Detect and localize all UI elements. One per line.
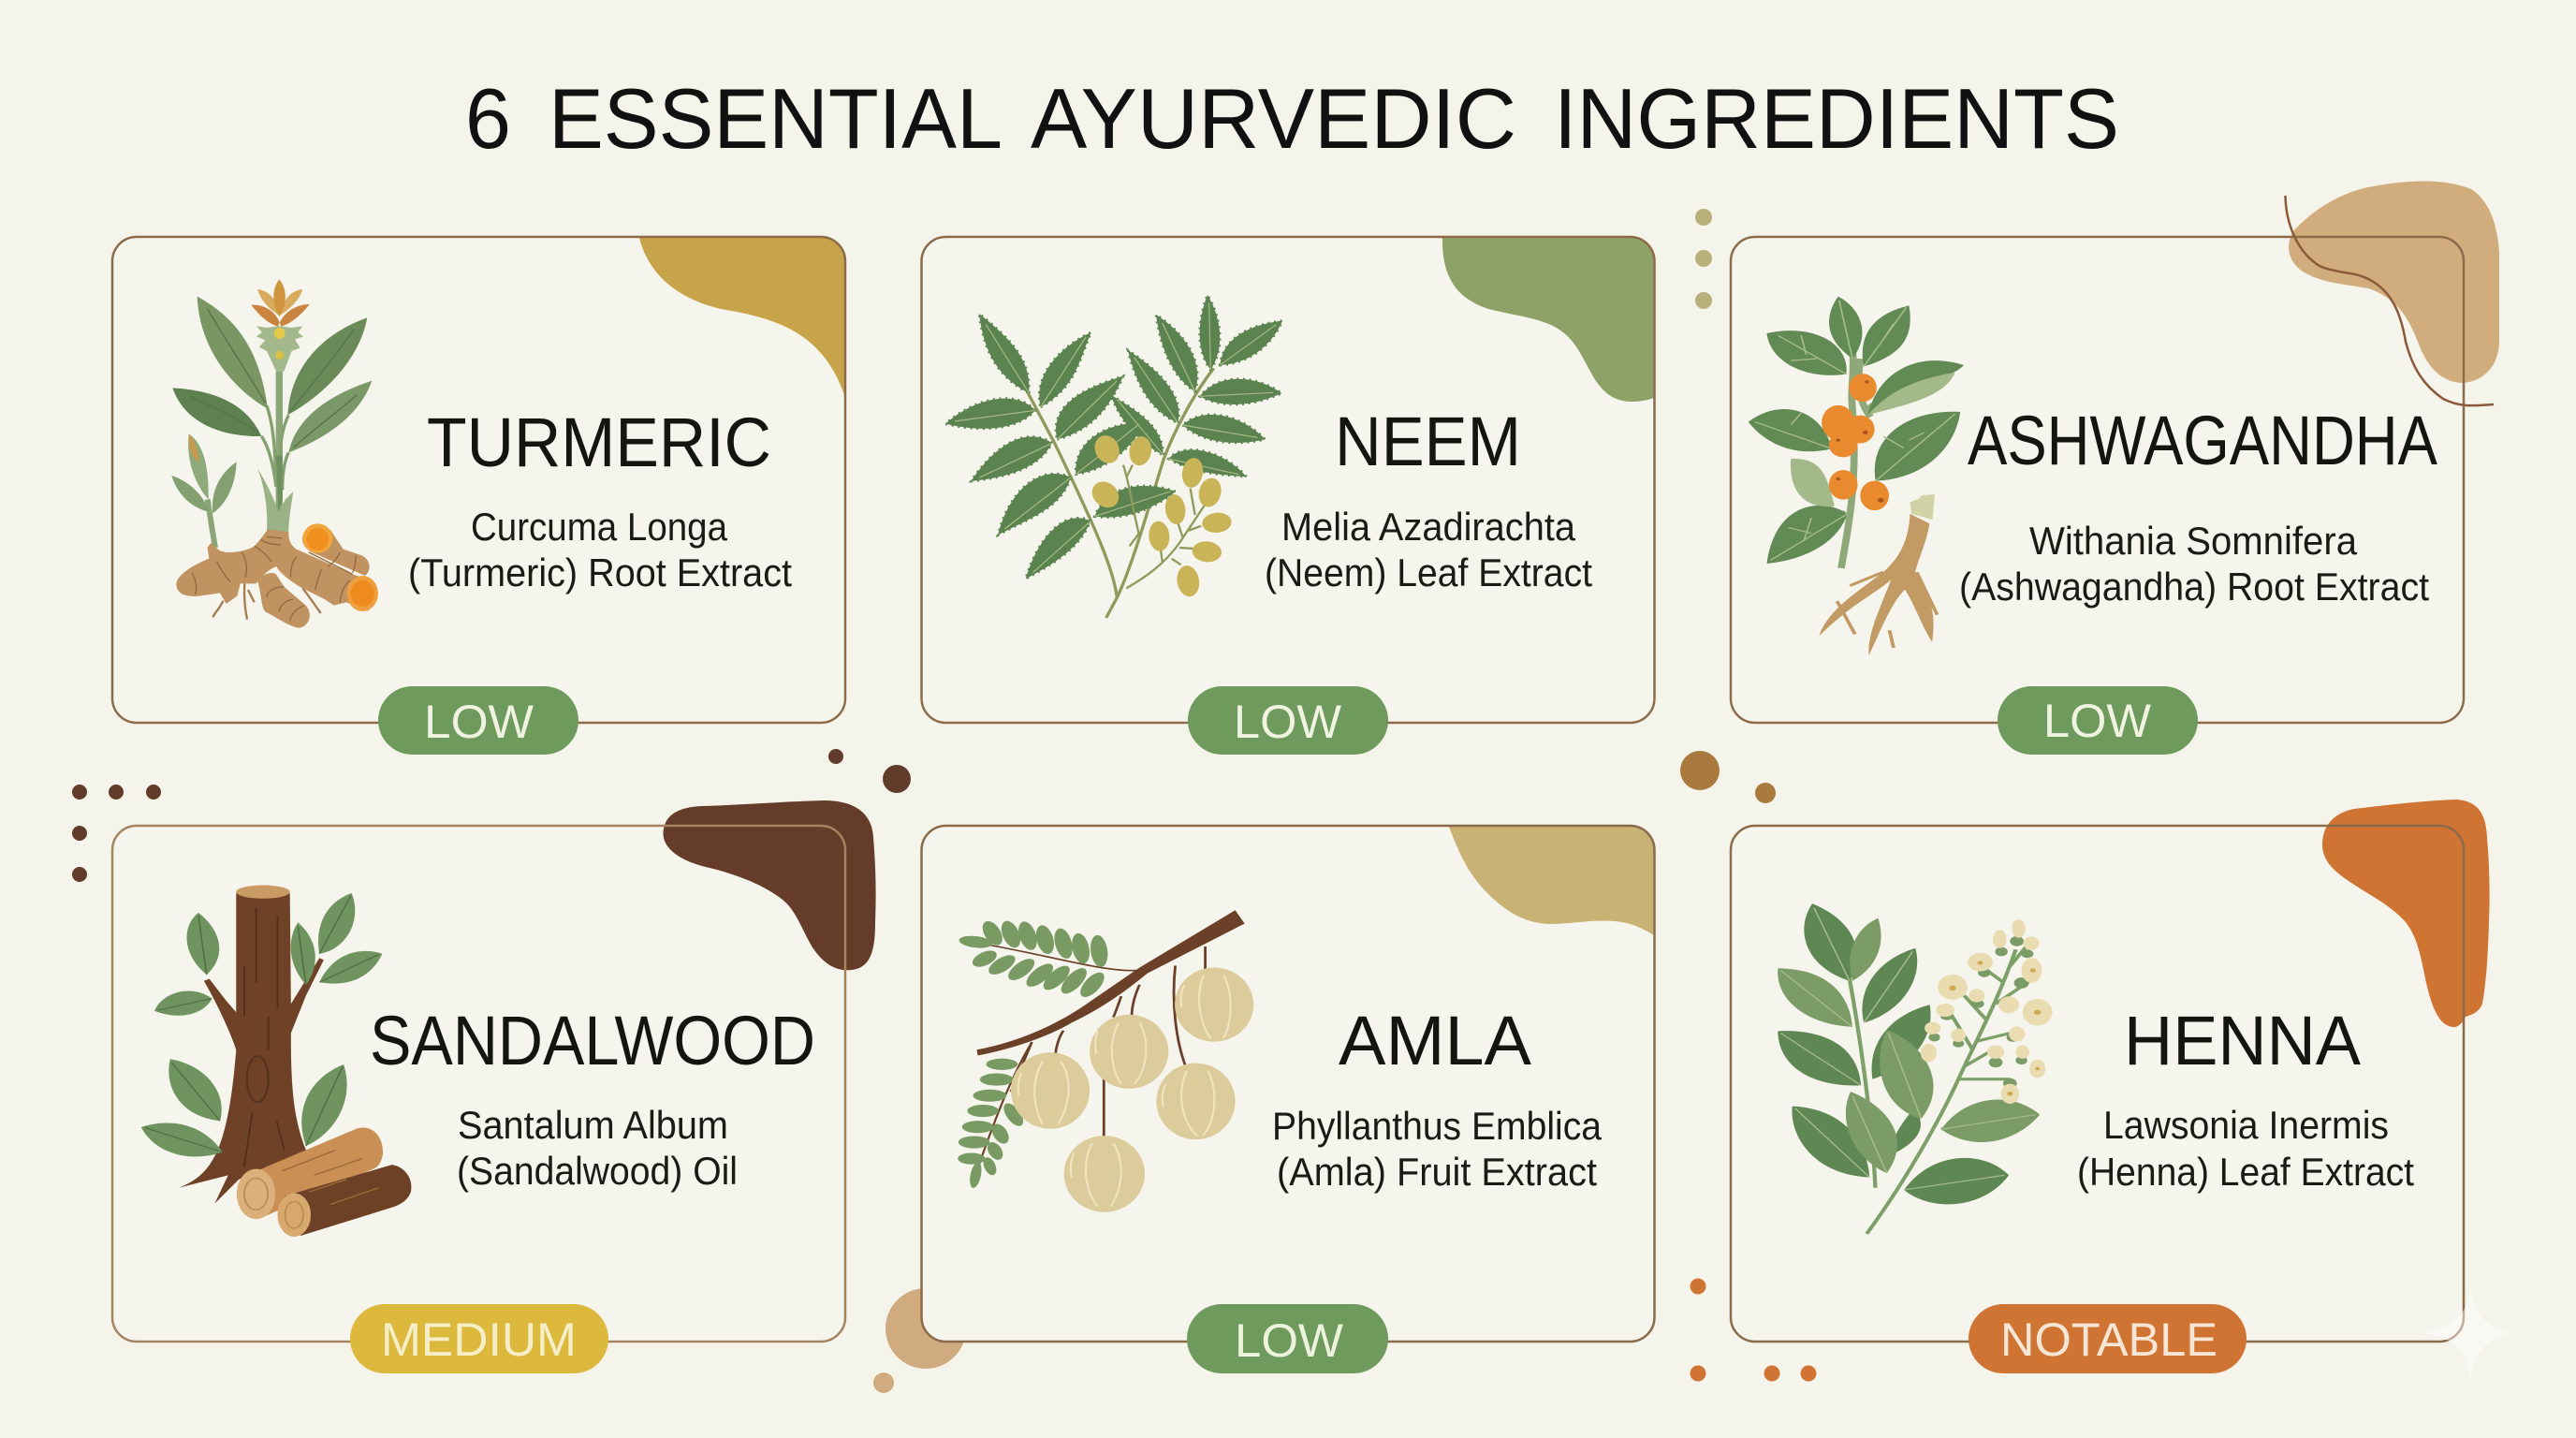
icon: neem branch <box>945 295 1282 618</box>
icon: ashwagandha plant and root <box>1749 297 1964 655</box>
decorative dots: orange <box>1690 1279 1816 1382</box>
text: neem botanical name: Melia Azadirachta <box>1281 505 1576 549</box>
badge: low: LOW <box>424 696 534 748</box>
text: neem botanical name: (Neem) Leaf Extract <box>1265 550 1592 594</box>
decorative shape: tan circle and dot <box>873 1288 966 1393</box>
badge: low <box>378 686 578 755</box>
text: ashwagandha botanical name: Withania Somnifera <box>2029 519 2358 563</box>
panel: neem <box>921 237 1655 755</box>
text: sandalwood botanical name <box>457 1103 738 1193</box>
text: turmeric botanical name <box>408 505 792 594</box>
panel: sandalwood <box>112 800 876 1373</box>
panel: amla <box>921 826 1655 1373</box>
panel: ashwagandha <box>1731 182 2499 755</box>
text: sandalwood botanical name: Santalum Album <box>458 1103 728 1147</box>
badge: notable: NOTABLE <box>2000 1313 2217 1366</box>
text: neem botanical name <box>1265 505 1592 594</box>
decorative dots: brown centre <box>828 749 911 793</box>
decorative dots: sage column <box>1695 209 1712 309</box>
text: amla botanical name: (Amla) Fruit Extract <box>1277 1150 1597 1194</box>
icon: amla branch with fruit <box>958 910 1253 1212</box>
decorative dots: brown corner <box>72 785 161 882</box>
heading: henna: HENNA <box>2124 1002 2362 1079</box>
heading: neem: NEEM <box>1335 403 1521 480</box>
text: amla botanical name <box>1272 1104 1603 1194</box>
badge: low <box>1187 1304 1388 1373</box>
panel: turmeric <box>112 237 845 755</box>
decorative curve <box>2286 196 2494 405</box>
heading: amla: AMLA <box>1339 1002 1532 1079</box>
text: ashwagandha botanical name <box>1959 519 2429 609</box>
heading: ashwagandha: ASHWAGANDHA <box>1968 402 2438 479</box>
icon: turmeric plant <box>171 279 378 628</box>
text: turmeric botanical name: Curcuma Longa <box>471 505 728 549</box>
badge: medium <box>350 1304 608 1373</box>
panel: henna <box>1731 800 2490 1373</box>
icon: henna sprig with flowers <box>1778 903 2053 1234</box>
text: henna botanical name <box>2077 1103 2414 1194</box>
badge: medium: MEDIUM <box>381 1313 577 1366</box>
text: sandalwood botanical name: (Sandalwood) Oil <box>457 1149 738 1193</box>
title <box>465 72 2119 167</box>
badge: low <box>1998 686 2198 755</box>
text: henna botanical name: (Henna) Leaf Extract <box>2077 1150 2414 1194</box>
title: INGREDIENTS <box>1554 72 2119 167</box>
badge: low: LOW <box>1235 1314 1344 1367</box>
text: turmeric botanical name: (Turmeric) Root Extract <box>408 550 792 594</box>
decorative dots: ochre <box>1680 751 1776 803</box>
title: AYURVEDIC <box>1031 72 1516 167</box>
text: ashwagandha botanical name: (Ashwagandha) Root Extract <box>1959 565 2429 609</box>
heading: turmeric: TURMERIC <box>427 404 771 481</box>
badge: low: LOW <box>1234 696 1342 748</box>
icon: sparkle watermark <box>2424 1286 2516 1380</box>
title: 6 <box>465 72 511 167</box>
text: henna botanical name: Lawsonia Inermis <box>2103 1103 2389 1147</box>
text: amla botanical name: Phyllanthus Emblica <box>1272 1104 1603 1148</box>
badge: notable <box>1969 1304 2247 1373</box>
icon: sandalwood tree and logs <box>141 886 411 1237</box>
title: ESSENTIAL <box>549 72 1003 167</box>
badge: low: LOW <box>2043 695 2152 747</box>
badge: low <box>1188 686 1388 755</box>
heading: sandalwood: SANDALWOOD <box>370 1002 815 1079</box>
